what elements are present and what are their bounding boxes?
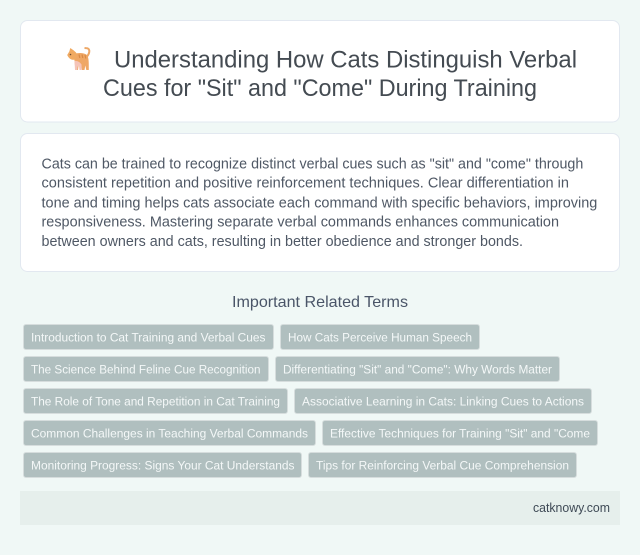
tag: challenges [24,420,316,446]
tag: tips [308,452,576,478]
tag: monitoring: Monitoring Progress: Signs Your Cat Understands [31,458,294,472]
tag: tips: Tips for Reinforcing Verbal Cue Comprehension [316,458,569,472]
text block: introduction [42,156,597,250]
tag: tone [24,388,288,414]
text block: introduction: between owners and cats, resulting in better obedience and stronger bonds. [42,234,523,250]
tag: introduction [24,324,274,350]
title [103,46,577,102]
tag: challenges: Common Challenges in Teaching Verbal Commands [31,426,308,440]
panel: intro text card [20,134,620,272]
text block: introduction: consistent repetition and positive reinforcement techniques. Clear differentiation in [42,176,569,192]
tag: perceive speech: How Cats Perceive Human Speech [288,330,472,344]
text block: introduction: responsiveness. Mastering separate verbal commands enhances communication [42,215,559,231]
text block: introduction: tone and timing helps cats associate each command with specific behaviors, improving [42,195,597,211]
panel: header card [20,20,620,122]
title: Cues for "Sit" and "Come" During Training [103,75,537,102]
tag: science [24,356,268,382]
tag: differentiating [276,356,560,382]
tag: differentiating: Differentiating "Sit" and "Come": Why Words Matter [283,362,552,376]
tag: introduction: Introduction to Cat Training and Verbal Cues [31,330,266,344]
title: Understanding How Cats Distinguish Verbal [114,46,577,74]
footer text: site name: catknowy.com [533,501,610,515]
tag: monitoring [24,452,302,478]
tag: techniques [322,420,598,446]
text block: introduction: Cats can be trained to recognize distinct verbal cues such as "sit" and "come" through [42,156,583,172]
tag: associative [294,388,592,414]
heading: important related terms: Important Related Terms [232,294,408,311]
tag: science: The Science Behind Feline Cue Recognition [31,362,261,376]
tag: perceive speech [280,324,480,350]
tag: associative: Associative Learning in Cats: Linking Cues to Actions [302,394,584,408]
tag: tone: The Role of Tone and Repetition in Cat Training [31,394,280,408]
icon: cat [67,48,89,70]
tag: techniques: Effective Techniques for Training "Sit" and "Come [330,426,590,440]
tag list [24,324,598,478]
footer [20,491,620,525]
